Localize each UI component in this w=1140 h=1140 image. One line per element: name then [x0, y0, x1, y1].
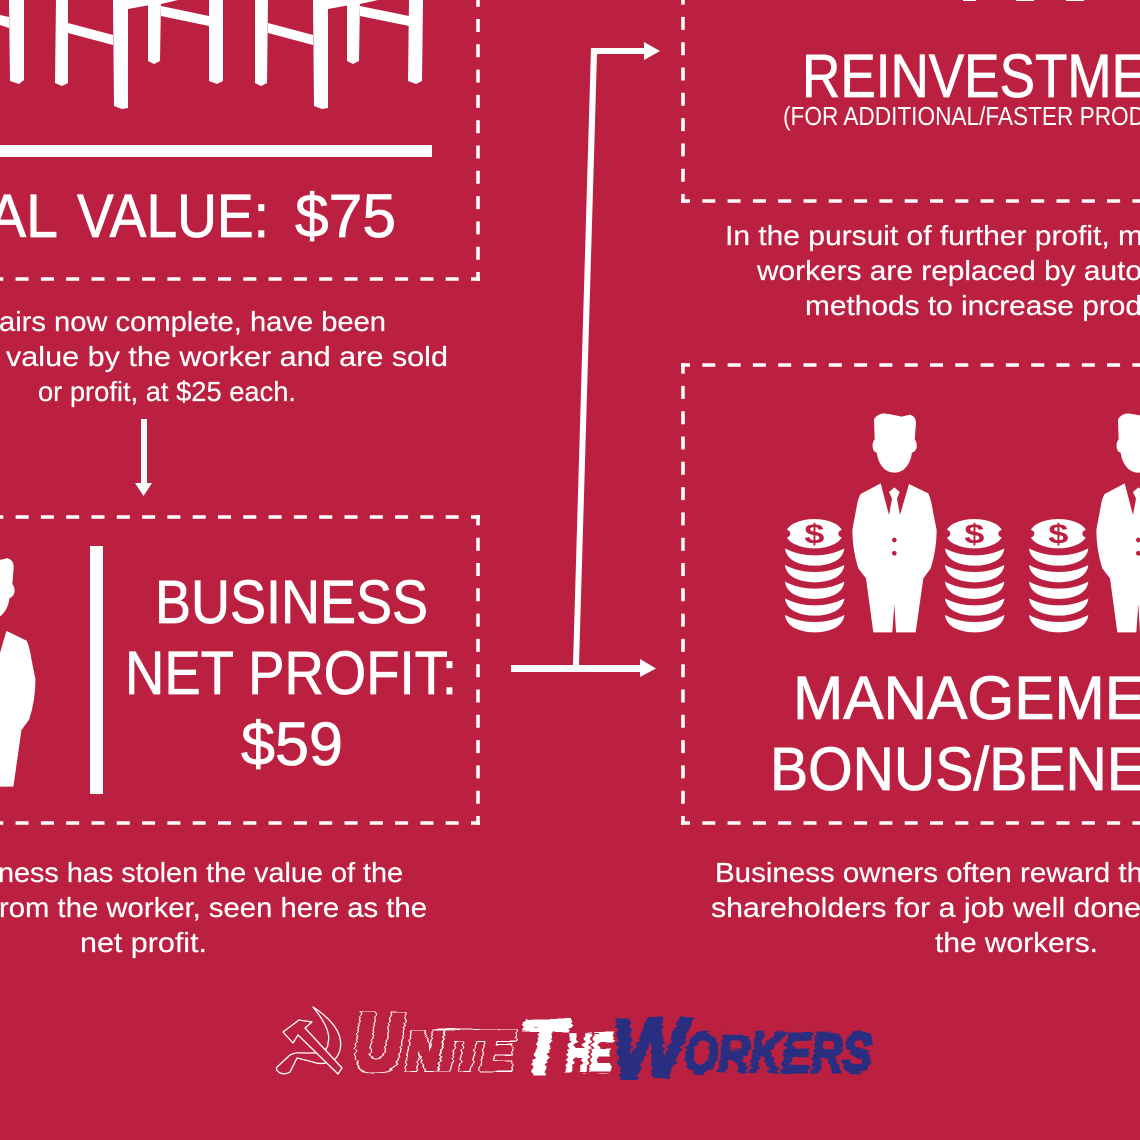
- text block: rewards: Business owners often reward th: [715, 857, 1140, 888]
- heading: total value: VALUE:: [77, 182, 269, 250]
- panel: reinvestment: [681, 0, 1140, 203]
- icon: machine base fragment: [963, 0, 1084, 1]
- icon: businessman: [0, 557, 35, 787]
- text block: chairs sold: or profit, at $25 each.: [38, 376, 296, 407]
- heading: total value: $75: [295, 182, 396, 250]
- arrow: down to net profit: [135, 419, 152, 496]
- icon: manager: [852, 413, 937, 632]
- divider bar: [90, 546, 103, 794]
- text block: automation: [725, 220, 1140, 321]
- text block: stolen value: [0, 857, 427, 958]
- divider bar: [0, 145, 432, 157]
- wordmark: Unite: NITE: [407, 1021, 515, 1081]
- panel border: net profit: [0, 515, 480, 825]
- text block: automation: workers are replaced by auto: [756, 255, 1140, 286]
- text block: chairs sold: value by the worker and are sold: [6, 341, 448, 372]
- heading: net profit: BUSINESS: [155, 568, 428, 636]
- text block: stolen value: net profit.: [80, 927, 207, 958]
- logo: Unite the Workers: [276, 997, 872, 1095]
- text block: rewards: the workers.: [935, 927, 1098, 958]
- heading: management bonus: MANAGEME: [793, 664, 1140, 732]
- wordmark: Unite: [354, 997, 515, 1088]
- wordmark: Workers: W: [612, 1001, 692, 1095]
- icon: coin stack: $: [964, 518, 985, 549]
- wordmark: The: T: [519, 1005, 571, 1090]
- panel border: management: [681, 363, 1140, 825]
- text block: stolen value: ness has stolen the value of the: [0, 857, 403, 888]
- text block: automation: methods to increase prod: [805, 290, 1140, 321]
- text block: chairs sold: [0, 306, 448, 407]
- wordmark: Workers: ORKERS: [684, 1021, 872, 1084]
- wordmark: The: [519, 1005, 613, 1090]
- wordmark: Workers: [612, 1001, 872, 1095]
- arrow: to reinvestment: [573, 42, 660, 665]
- heading: net profit: $59: [241, 710, 343, 778]
- panel border: total value: [0, 0, 480, 281]
- heading: management bonus: [770, 664, 1140, 803]
- icon: manager: [1096, 413, 1140, 632]
- text block: chairs sold: airs now complete, have been: [0, 306, 386, 337]
- icon: hammer and sickle: [276, 1007, 342, 1074]
- arrow: to management bonus: [511, 659, 656, 677]
- icon: row of chairs: [0, 0, 423, 109]
- wordmark: Unite: U: [354, 997, 403, 1088]
- heading: net profit: [125, 568, 457, 778]
- wordmark: The: HE: [566, 1023, 613, 1083]
- text block: rewards: shareholders for a job well done: [711, 892, 1140, 923]
- icon: coin stack: [943, 518, 1006, 632]
- text block: automation: In the pursuit of further profit, m: [725, 220, 1140, 251]
- icon: coin stack: $: [1048, 518, 1069, 549]
- panel: total value: [0, 0, 480, 281]
- heading: net profit: NET PROFIT:: [125, 639, 457, 707]
- panel: management bonus: [681, 363, 1140, 825]
- heading: total value: [0, 182, 396, 250]
- icon: coin stack: $: [804, 518, 825, 549]
- icon: coin stack: [1027, 518, 1090, 632]
- icon: coin stack: [783, 518, 846, 632]
- panel: business net profit: [0, 515, 480, 825]
- panel border: reinvestment: [681, 0, 1140, 203]
- text block: rewards: [711, 857, 1140, 958]
- text block: stolen value: rom the worker, seen here as the: [0, 892, 427, 923]
